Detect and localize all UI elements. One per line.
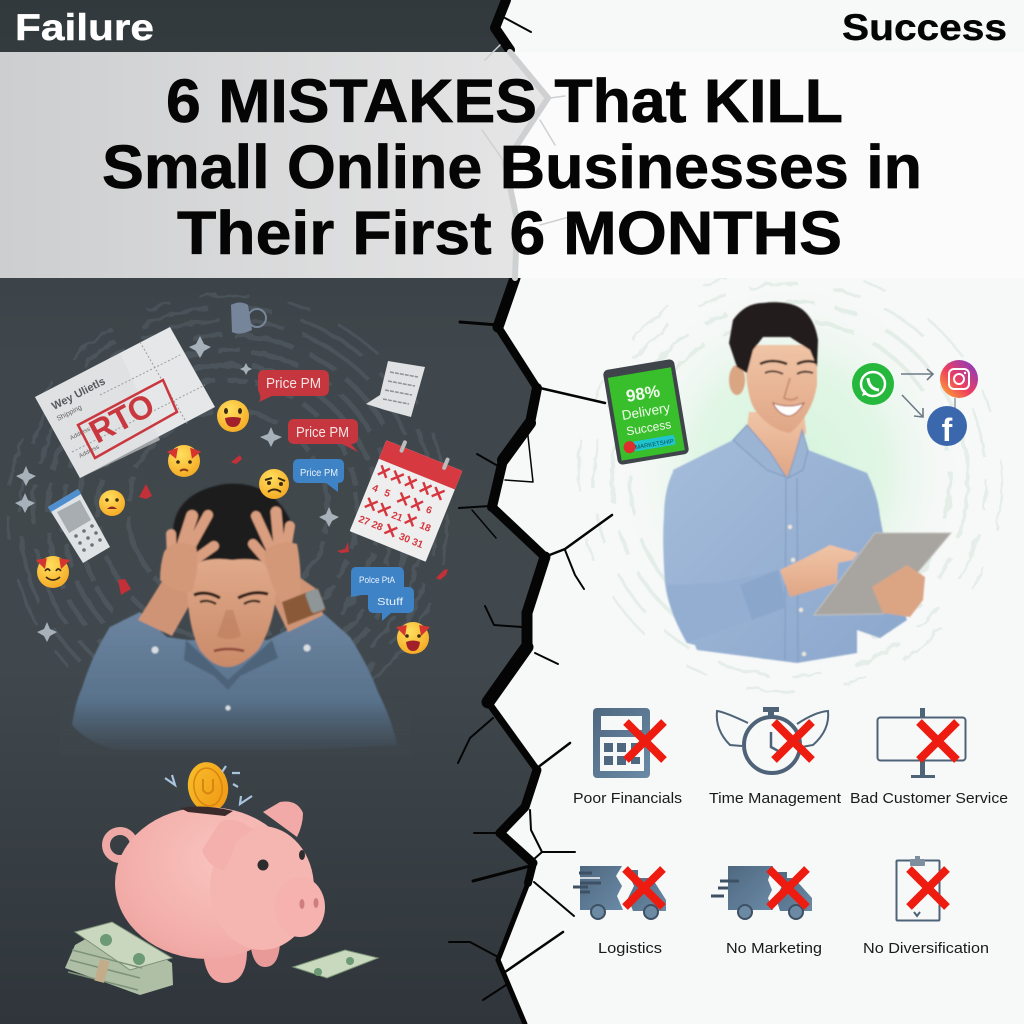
calendar with crossed days: 18 — [418, 520, 433, 535]
calendar with crossed days: 6 — [424, 505, 434, 517]
RTO shipping paper: Address — [78, 444, 101, 460]
emoji: surprised — [217, 400, 249, 432]
mistake: logistics — [573, 866, 666, 957]
stressed man — [60, 484, 410, 755]
calendar with crossed days: 4 — [370, 483, 380, 495]
mistake: no marketing — [711, 866, 822, 957]
mistake: time management — [709, 707, 842, 807]
calendar with crossed days — [350, 434, 465, 562]
right hand with fingers — [253, 512, 301, 604]
calendar with crossed days: 27 — [357, 514, 372, 529]
label: No Diversification — [863, 940, 989, 957]
cash stack — [65, 922, 173, 995]
title text — [102, 67, 922, 267]
icon: WhatsApp — [852, 363, 894, 405]
mistake: no diversification — [863, 856, 989, 957]
RTO stamp — [78, 380, 177, 458]
loose bill — [293, 950, 378, 978]
piggy bank — [65, 759, 378, 995]
emoji: sad, overlapping the hair — [259, 469, 289, 499]
icon: broken truck — [711, 866, 812, 919]
icon: clipboard — [896, 856, 940, 920]
icon: faded mug — [231, 302, 266, 334]
watch — [282, 588, 326, 625]
chat bubbles: Price PM: Price PM — [266, 375, 321, 392]
small document — [366, 361, 425, 417]
chat bubbles: Price PM: Price PM — [296, 424, 349, 441]
collar — [733, 425, 808, 478]
RTO shipping paper — [35, 327, 215, 478]
phone: delivery success: Delivery — [621, 400, 671, 423]
hair — [729, 302, 818, 373]
shirt buttons — [788, 525, 806, 656]
mistake: poor financials — [573, 708, 682, 807]
happy man — [663, 302, 951, 663]
emoji: worried — [99, 490, 125, 516]
icon: Instagram — [940, 360, 978, 398]
calculator — [48, 489, 110, 563]
pointing hand — [780, 545, 858, 597]
social icons with arrows — [852, 360, 978, 448]
label: Poor Financials — [573, 790, 682, 807]
mistake icons grid — [573, 707, 1008, 957]
mistake: bad customer service — [850, 708, 1008, 807]
icon: winged stopwatch — [717, 707, 828, 773]
calendar with crossed days: 31 — [410, 537, 425, 551]
shirt — [72, 612, 397, 750]
red cross — [774, 722, 812, 760]
stressed scattered sparkles — [15, 336, 339, 642]
face — [187, 559, 277, 667]
icon: Facebook: f — [942, 412, 953, 448]
red cross — [626, 722, 664, 760]
shirt — [663, 425, 907, 663]
red accents — [118, 455, 448, 595]
placket — [785, 478, 798, 662]
left hand with fingers — [160, 515, 214, 592]
phone: delivery success: MARKETSHIP — [635, 439, 674, 451]
forearms — [138, 575, 198, 636]
face — [729, 365, 745, 395]
heading: Failure: Failure — [15, 7, 154, 48]
emoji: devil smile — [37, 556, 69, 588]
RTO shipping paper: Shipping — [56, 404, 83, 423]
crack — [449, 0, 612, 1024]
red cross — [909, 869, 947, 907]
emoji: devil angry — [168, 445, 200, 477]
icon: broken truck — [573, 866, 666, 919]
left swirl background — [8, 295, 448, 735]
phone: delivery success — [603, 359, 689, 465]
red cross — [769, 869, 807, 907]
calendar with crossed days: 21 — [390, 510, 404, 525]
RTO shipping paper: Wey Ulietls — [50, 375, 107, 413]
calendar with crossed days: 30 — [397, 531, 412, 546]
title banner — [0, 45, 1024, 278]
label: No Marketing — [726, 940, 822, 957]
chat bubbles: Price PM: Price PM — [300, 467, 338, 479]
neck — [747, 412, 806, 477]
phone: delivery success: 98% — [625, 382, 661, 406]
red cross — [919, 722, 957, 760]
label: Time Management — [709, 790, 842, 807]
holding hand — [872, 565, 925, 617]
icon: monitor — [878, 708, 966, 778]
RTO shipping paper: Address — [69, 426, 92, 442]
calendar with crossed days: 5 — [382, 488, 392, 500]
forearm — [667, 570, 787, 643]
heading: Success: Success — [842, 7, 1007, 48]
right glow and swirl background — [578, 268, 1002, 692]
chat bubbles: Price PM — [258, 370, 414, 621]
title text: Their First 6 MONTHS — [177, 199, 842, 267]
tablet — [814, 533, 951, 615]
calendar with crossed days: 28 — [370, 519, 385, 534]
background: failure side — [0, 0, 548, 1024]
arrows — [901, 369, 933, 417]
phone: delivery success: Success — [625, 417, 672, 438]
chat bubbles: Price PM: Stuff — [377, 597, 403, 608]
title text: 6 MISTAKES That KILL — [166, 67, 843, 135]
label: Logistics — [598, 940, 662, 957]
RTO stamp: RTO — [83, 386, 160, 450]
label: Bad Customer Service — [850, 790, 1008, 807]
emoji: devil shouting — [397, 622, 429, 654]
icon: gold coin — [184, 759, 232, 815]
red cross — [625, 869, 663, 907]
icon: calculator — [593, 708, 650, 778]
hair — [173, 484, 292, 566]
chat bubbles: Price PM: Polce PtA — [359, 575, 396, 586]
title text: Small Online Businesses in — [102, 133, 922, 201]
